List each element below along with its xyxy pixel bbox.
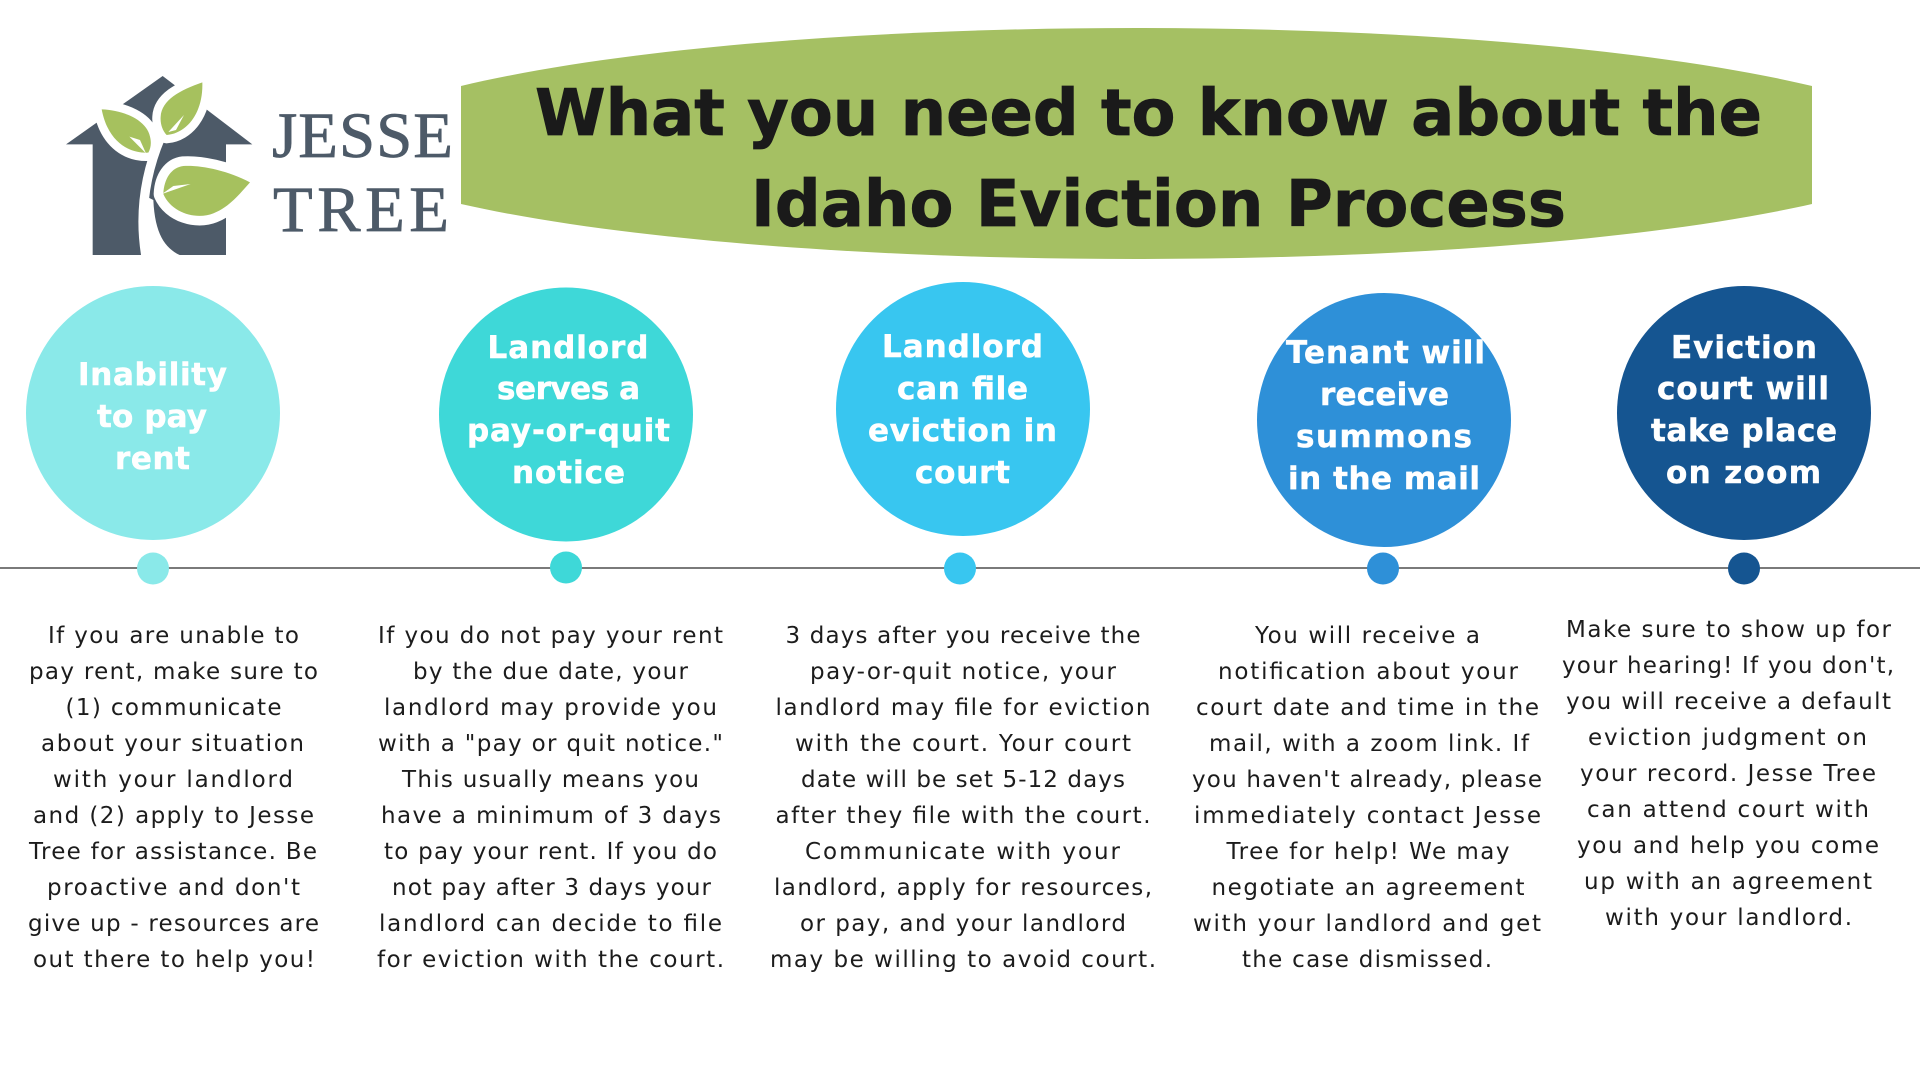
step 2 heading: Landlord	[488, 330, 648, 366]
step 3 heading	[868, 329, 1057, 491]
step 4 description: you haven't already, please	[1192, 767, 1542, 793]
panel: step 2 pay-or-quit notice	[377, 288, 724, 973]
step 2 description: landlord may provide you	[384, 695, 717, 721]
banner shape	[461, 28, 1812, 259]
logo wordmark: JESSE: JESSE	[272, 100, 453, 172]
step 5 description: you will receive a default	[1566, 689, 1891, 715]
step 3 description	[770, 623, 1156, 973]
step 4 description: with your landlord and get	[1193, 911, 1541, 937]
circle badge 5	[1617, 286, 1871, 540]
step 3 description: after they file with the court.	[776, 803, 1150, 829]
step 5 description: eviction judgment on	[1588, 725, 1867, 751]
step 2 description: to pay your rent. If you do	[384, 839, 717, 865]
step 4 description	[1192, 623, 1542, 973]
step 4 heading: summons	[1296, 419, 1472, 455]
step 5 heading: court will	[1657, 371, 1829, 407]
title text	[535, 77, 1762, 242]
step 1 description: out there to help you!	[33, 947, 315, 973]
step 2 description: with a "pay or quit notice."	[378, 731, 723, 757]
step 3 description: or pay, and your landlord	[800, 911, 1126, 937]
timeline dot 2	[550, 552, 582, 584]
step 3 heading: court	[915, 455, 1010, 491]
step 2 description: have a minimum of 3 days	[381, 803, 721, 829]
step 5 description: can attend court with	[1587, 797, 1869, 823]
step 1 heading: Inability	[78, 357, 227, 393]
step 2 heading: pay-or-quit	[467, 413, 670, 449]
step 5 description: up with an agreement	[1584, 869, 1872, 895]
step 5 description: your record. Jesse Tree	[1580, 761, 1876, 787]
step 4 description: negotiate an agreement	[1212, 875, 1524, 901]
timeline dot 3	[944, 552, 976, 584]
title text: Idaho Eviction Process	[751, 168, 1566, 242]
step 5 description: Make sure to show up for	[1566, 617, 1892, 643]
step 2 description: This usually means you	[401, 767, 699, 793]
panel: step 1 inability to pay rent	[26, 286, 319, 973]
step 5 description: you and help you come	[1577, 833, 1879, 859]
step 4 description: mail, with a zoom link. If	[1209, 731, 1530, 757]
step 1 description	[28, 623, 319, 973]
logo wordmark: TREE: TREE	[273, 174, 449, 246]
step 4 heading	[1286, 335, 1485, 497]
step 4 description: court date and time in the	[1196, 695, 1539, 721]
timeline dot 1	[137, 552, 169, 584]
step 1 description: (1) communicate	[66, 695, 282, 721]
step 2 heading: serves a	[497, 371, 640, 407]
panel: step 4 summons in the mail	[1192, 293, 1542, 973]
step 3 description: landlord, apply for resources,	[774, 875, 1152, 901]
step 5 description: with your landlord.	[1605, 905, 1852, 931]
step 1 description: with your landlord	[53, 767, 293, 793]
step 3 description: 3 days after you receive the	[786, 623, 1140, 649]
step 5 description: your hearing! If you don't,	[1562, 653, 1894, 679]
step 4 heading: Tenant will	[1286, 335, 1485, 371]
step 2 description: not pay after 3 days your	[392, 875, 712, 901]
circle badge 4	[1257, 293, 1511, 547]
step 4 description: the case dismissed.	[1242, 947, 1492, 973]
step 1 description: Tree for assistance. Be	[28, 839, 317, 865]
step 1 heading: rent	[115, 441, 190, 477]
step 1 description: about your situation	[41, 731, 304, 757]
step 4 description: You will receive a	[1254, 623, 1480, 649]
step 5 description	[1562, 617, 1894, 931]
step 5 heading: on zoom	[1666, 455, 1821, 491]
step 4 description: notification about your	[1218, 659, 1519, 685]
step 4 description: immediately contact Jesse	[1194, 803, 1541, 829]
step 4 heading: receive	[1320, 377, 1449, 413]
circle badge 2	[439, 288, 693, 542]
timeline dot 4	[1367, 552, 1399, 584]
step 5 heading: take place	[1651, 413, 1837, 449]
logo: Jesse Tree	[66, 76, 453, 257]
step 1 description: If you are unable to	[48, 623, 299, 649]
step 3 description: with the court. Your court	[795, 731, 1131, 757]
step 5 heading	[1651, 330, 1837, 491]
step 3 heading: can file	[897, 371, 1028, 407]
circle badge 1	[26, 286, 280, 540]
icon: house with tree and leaves	[66, 76, 252, 257]
step 2 description: for eviction with the court.	[377, 947, 724, 973]
step 1 heading: to pay	[97, 399, 207, 435]
step 3 description: date will be set 5-12 days	[801, 767, 1125, 793]
step 2 description: by the due date, your	[413, 659, 689, 685]
step 3 description: landlord may file for eviction	[776, 695, 1150, 721]
timeline line	[0, 567, 1920, 569]
step 1 heading	[78, 357, 227, 477]
step 1 description: give up - resources are	[28, 911, 319, 937]
step 4 description: Tree for help! We may	[1226, 839, 1510, 865]
title text: What you need to know about the	[535, 77, 1762, 151]
step 2 description: landlord can decide to file	[379, 911, 722, 937]
step 4 heading: in the mail	[1288, 461, 1480, 497]
step 3 heading: eviction in	[868, 413, 1057, 449]
step 1 description: and (2) apply to Jesse	[33, 803, 314, 829]
title banner	[461, 28, 1812, 259]
step 5 heading: Eviction	[1671, 330, 1817, 366]
step 3 heading: Landlord	[882, 329, 1043, 365]
panel: step 3 file eviction in court	[770, 282, 1156, 973]
step 3 description: Communicate with your	[805, 839, 1121, 865]
step 2 description: If you do not pay your rent	[378, 623, 723, 649]
step 2 description	[377, 623, 724, 973]
step 3 description: may be willing to avoid court.	[770, 947, 1156, 973]
panel: step 5 eviction court on zoom	[1562, 286, 1894, 931]
step 3 description: pay-or-quit notice, your	[810, 659, 1117, 685]
step 2 heading	[467, 330, 670, 491]
step 2 heading: notice	[512, 455, 625, 491]
step 1 description: proactive and don't	[47, 875, 300, 901]
step 1 description: pay rent, make sure to	[29, 659, 318, 685]
timeline dot 5	[1728, 552, 1760, 584]
circle badge 3	[836, 282, 1090, 536]
